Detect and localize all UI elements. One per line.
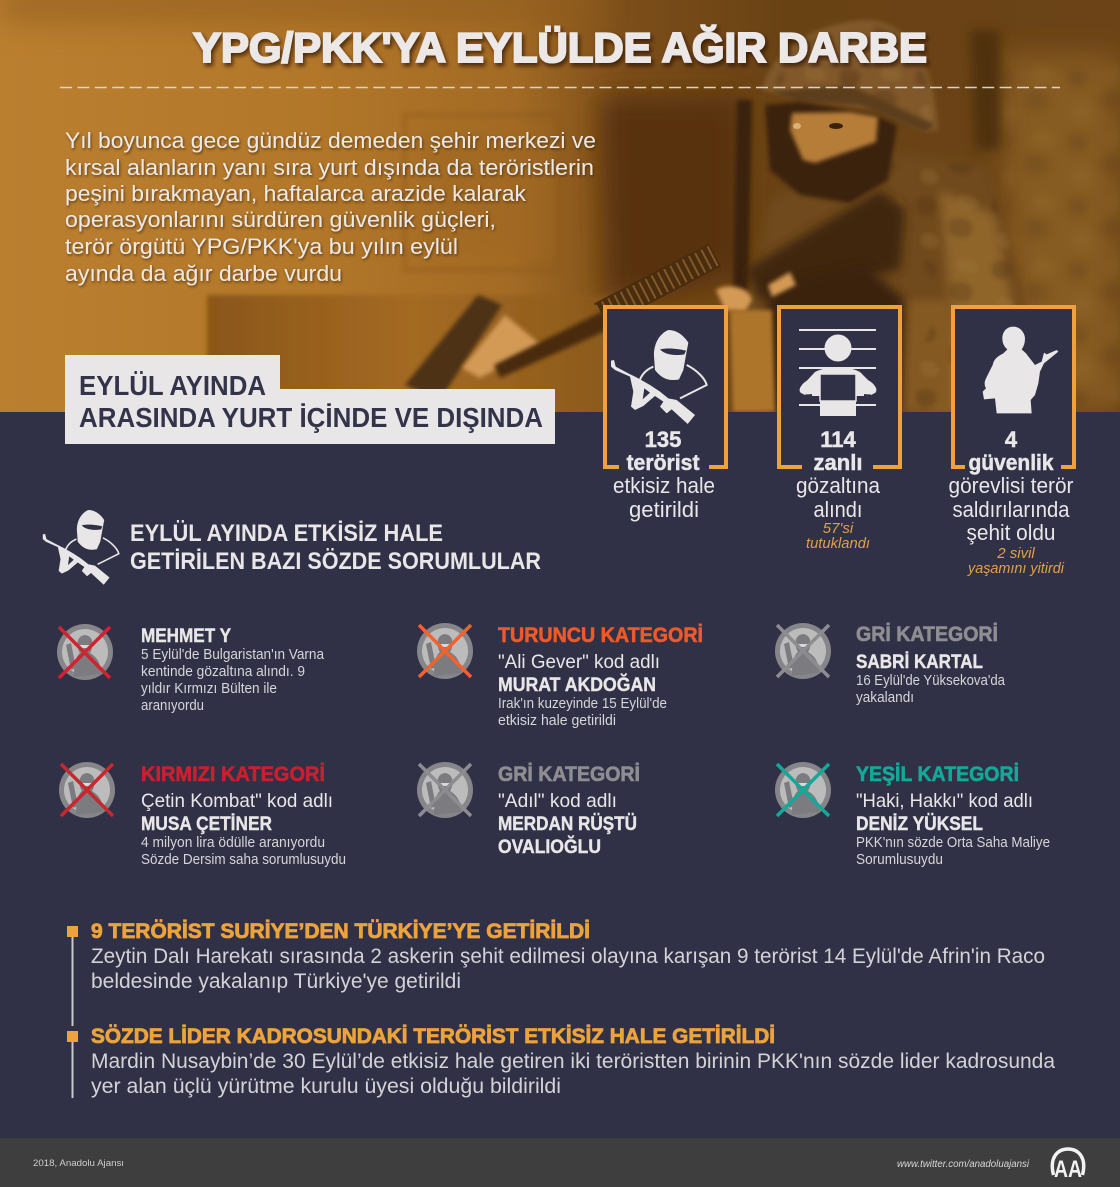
panel: stat security: yaşamını yitirdi: [967, 560, 1065, 577]
person: Musa Çetiner: MUSA ÇETİNER: [141, 814, 272, 835]
section heading: [43, 510, 541, 585]
panel: stat detained: 57'si: [823, 520, 854, 537]
person: Murat Akdoğan: TURUNCU KATEGORİ: [498, 624, 703, 647]
person: Musa Çetiner: Sözde Dersim saha sorumlusuydu: [141, 852, 346, 868]
person: Mehmet Y: yıldır Kırmızı Bülten ile: [141, 681, 277, 697]
icon: mugshot: [799, 329, 876, 416]
person: Musa Çetiner: Çetin Kombat" kod adlı: [141, 790, 333, 812]
person: Musa Çetiner: [59, 762, 346, 868]
person: Merdan Rüştü Ovalıoğlu: "Adıl" kod adlı: [498, 790, 617, 812]
timeline markers: [67, 926, 78, 1098]
text block: 9 terrorists: 9 TERÖRİST SURİYE’DEN TÜRKİYE’YE GETİRİLDİ: [91, 920, 590, 943]
panel: stat security: güvenlik: [968, 450, 1054, 475]
panel: stat detained: [779, 307, 900, 552]
text block: 9 terrorists: beldesinde yakalanıp Türkiye'ye getirildi: [91, 969, 461, 993]
person: Mehmet Y: MEHMET Y: [141, 626, 231, 647]
panel: stat detained: zanlı: [814, 450, 862, 475]
person: Sabri Kartal: SABRİ KARTAL: [856, 652, 983, 673]
intro text block: ayında da ağır darbe vurdu: [65, 261, 342, 286]
panel: stat terrorists: getirildi: [629, 497, 699, 522]
panel: stat security: görevlisi terör: [948, 473, 1074, 498]
text block: leadership: SÖZDE LİDER KADROSUNDAKİ TERÖRİST ETKİSİZ HALE GETİRİLDİ: [91, 1025, 775, 1048]
person: Murat Akdoğan: "Ali Gever" kod adlı: [498, 651, 660, 673]
person: Deniz Yüksel: Sorumlusuydu: [856, 852, 943, 868]
intro text block: peşini bırakmayan, haftalarca arazide kalarak: [65, 181, 527, 206]
person: Sabri Kartal: GRİ KATEGORİ: [856, 623, 998, 646]
intro text block: kırsal alanların yanı sıra yurt dışında da teröristlerin: [65, 155, 594, 180]
person: Murat Akdoğan: [417, 623, 703, 729]
footer bar: www.twitter.com/anadoluajansi: [897, 1159, 1030, 1170]
person: Deniz Yüksel: "Haki, Hakkı" kod adlı: [856, 790, 1033, 812]
panel: stat terrorists: 135: [645, 427, 681, 452]
person: Merdan Rüştü Ovalıoğlu: OVALIOĞLU: [498, 836, 601, 858]
text block: leadership: yer alan üçlü yürütme kurulu üyesi olduğu bildirildi: [91, 1074, 561, 1098]
person: Mehmet Y: 5 Eylül'de Bulgaristan'ın Varna: [141, 647, 325, 663]
panel: stat detained: 114: [820, 427, 857, 452]
panel: stat detained: gözaltına: [796, 473, 881, 498]
callout: white label: ARASINDA YURT İÇİNDE VE DIŞINDA: [79, 402, 543, 433]
panel: stat detained: alındı: [814, 497, 862, 522]
dashed divider: [60, 86, 1060, 88]
intro text block: [65, 128, 596, 286]
person: Merdan Rüştü Ovalıoğlu: [417, 762, 640, 858]
intro text block: operasyonlarını sürdüren güvenlik güçleri,: [65, 207, 496, 232]
person: Deniz Yüksel: DENİZ YÜKSEL: [856, 814, 983, 835]
callout: white label: [65, 355, 555, 444]
panel: stat terrorists: [605, 307, 726, 522]
person: Deniz Yüksel: YEŞİL KATEGORİ: [856, 763, 1019, 786]
icon: AA logo: AA: [1054, 1156, 1082, 1183]
person: Murat Akdoğan: MURAT AKDOĞAN: [498, 674, 656, 696]
icon: masked militant: [611, 330, 707, 424]
section heading: EYLÜL AYINDA ETKİSİZ HALE: [130, 520, 443, 547]
person: Sabri Kartal: yakalandı: [856, 690, 914, 706]
panel: stat security: 2 sivil: [996, 545, 1035, 562]
person: Musa Çetiner: 4 milyon lira ödülle aranıyordu: [141, 835, 325, 851]
text block: 9 terrorists: [91, 920, 1045, 993]
icon: militant: [43, 510, 119, 585]
person: Deniz Yüksel: PKK'nın sözde Orta Saha Maliye: [856, 835, 1050, 851]
panel: stat security: 4: [1005, 427, 1018, 452]
person: Mehmet Y: aranıyordu: [141, 698, 204, 714]
person: Mehmet Y: kentinde gözaltına alındı. 9: [141, 664, 305, 680]
person: Musa Çetiner: KIRMIZI KATEGORİ: [141, 763, 325, 786]
person: Murat Akdoğan: Irak'ın kuzeyinde 15 Eylül'de: [498, 696, 667, 712]
text block: 9 terrorists: Zeytin Dalı Harekatı sırasında 2 askerin şehit edilmesi olayına karışan 9 terörist 14 Eylül'de Afrin'in Raco: [91, 944, 1045, 968]
panel: stat detained: tutuklandı: [806, 535, 870, 552]
intro text block: terör örgütü YPG/PKK'ya bu yılın eylül: [65, 234, 458, 259]
panel: stat terrorists: terörist: [626, 450, 700, 475]
text block: leadership: Mardin Nusaybin’de 30 Eylül’de etkisiz hale getiren iki teröristten birinin PKK'nın sözde lider kadrosunda: [91, 1049, 1055, 1073]
panel: stat security: saldırılarında: [952, 497, 1070, 522]
person: Merdan Rüştü Ovalıoğlu: GRİ KATEGORİ: [498, 763, 640, 786]
callout: white label: EYLÜL AYINDA: [79, 370, 266, 401]
icon: AA logo: [1052, 1149, 1084, 1183]
footer bar: 2018, Anadolu Ajansı: [33, 1158, 124, 1169]
person: Murat Akdoğan: etkisiz hale getirildi: [498, 713, 616, 729]
background photo: soldier in orange duotone: [0, 0, 1120, 420]
person: Sabri Kartal: 16 Eylül'de Yüksekova'da: [856, 673, 1006, 689]
person: Deniz Yüksel: [775, 762, 1050, 868]
panel: stat security: [948, 307, 1074, 577]
section heading: GETİRİLEN BAZI SÖZDE SORUMLULAR: [130, 548, 541, 575]
person: Merdan Rüştü Ovalıoğlu: MERDAN RÜŞTÜ: [498, 814, 637, 835]
icon: soldier: [983, 327, 1058, 413]
person: Mehmet Y: [57, 624, 325, 714]
panel: stat security: şehit oldu: [966, 520, 1056, 545]
footer bar: [0, 1138, 1120, 1187]
title: YPG/PKK'YA EYLÜLDE AĞIR DARBE: [193, 24, 927, 71]
text block: leadership: [91, 1025, 1055, 1098]
intro text block: Yıl boyunca gece gündüz demeden şehir merkezi ve: [65, 128, 596, 153]
panel: stat terrorists: etkisiz hale: [613, 473, 715, 498]
person: Sabri Kartal: [775, 623, 1006, 706]
